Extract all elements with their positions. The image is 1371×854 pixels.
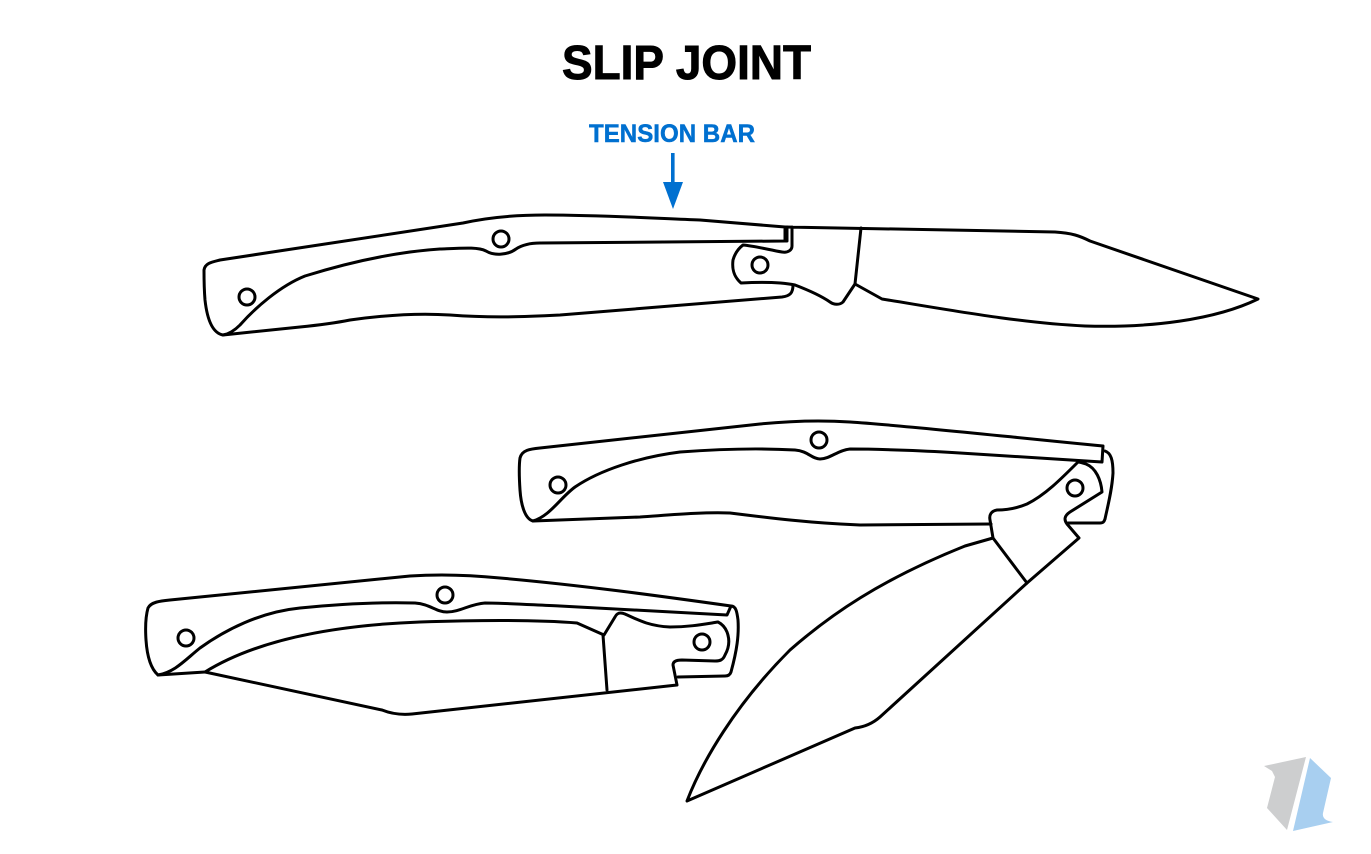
ricasso line xyxy=(855,228,861,284)
back spring xyxy=(678,606,738,677)
blade, tang and spine xyxy=(733,227,1258,326)
bolster to blade start xyxy=(158,672,205,675)
label: tension bar: TENSION BAR xyxy=(589,120,755,148)
handle outline and tension bar xyxy=(519,421,1103,521)
handle belly and back spring xyxy=(533,513,991,525)
ricasso line xyxy=(603,635,607,690)
blade xyxy=(205,613,729,714)
title: SLIP JOINT xyxy=(562,37,811,90)
handle outline and tension bar xyxy=(204,215,785,335)
knife: fully open xyxy=(204,215,1258,335)
pins xyxy=(178,630,194,646)
tang xyxy=(990,462,1102,583)
knife: half open xyxy=(519,421,1113,801)
handle belly xyxy=(223,285,793,335)
logo watermark xyxy=(1264,757,1333,831)
tension bar inner line xyxy=(785,227,787,241)
pins xyxy=(550,477,566,493)
pins xyxy=(239,289,255,305)
arrow: pointing to tension bar xyxy=(663,153,683,209)
blade xyxy=(687,538,1027,801)
handle outline and tension bar xyxy=(146,575,731,675)
spring end xyxy=(1068,451,1113,523)
knife: closed to half-stop xyxy=(146,575,738,714)
